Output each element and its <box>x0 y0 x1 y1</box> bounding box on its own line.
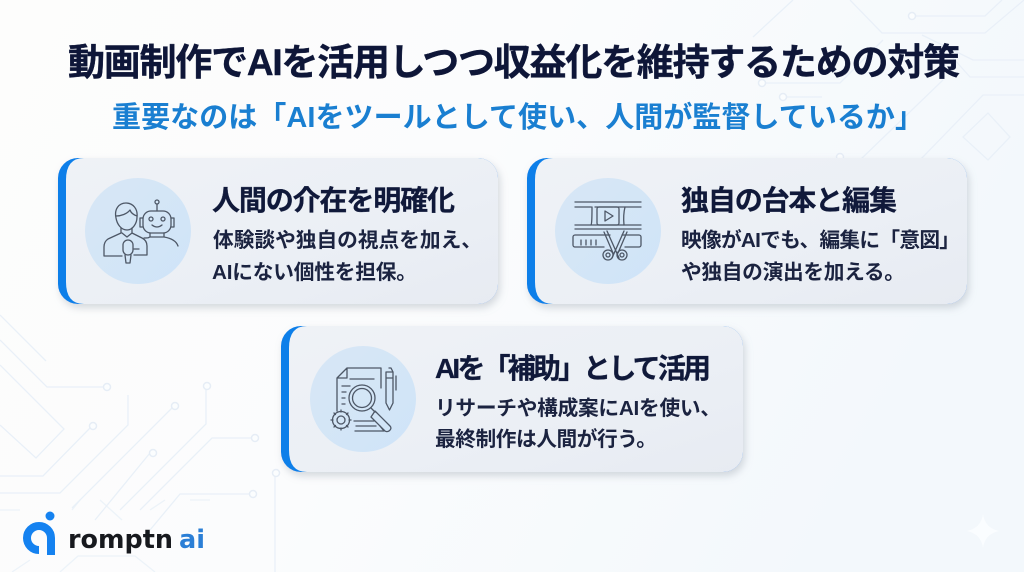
logo wordmark: ai <box>179 525 205 555</box>
icon: logo mark <box>27 512 54 555</box>
heading: 独自の台本と編集 <box>681 185 897 216</box>
panel: original script and editing <box>527 158 967 304</box>
logo wordmark: romptn <box>68 525 173 555</box>
background circuit pattern: lower left <box>0 315 280 572</box>
body text: 映像がAIでも、編集に「意図」 <box>681 228 960 252</box>
panel: human involvement <box>58 158 498 304</box>
body text: 体験談や独自の視点を加え、 <box>213 229 482 252</box>
panel: AI as assistant <box>281 326 743 472</box>
body text line 2: 最終制作は人間が行う。 <box>435 427 657 451</box>
icon: person and robot <box>85 178 191 284</box>
icon: document, magnifier, gear, pen <box>310 346 416 452</box>
icon: sparkle <box>967 514 999 548</box>
logo <box>27 512 205 555</box>
body text: リサーチや構成案にAIを使い、 <box>435 396 721 420</box>
heading: AIを「補助」として活用 <box>435 353 711 384</box>
body text line 2: AIにない個性を担保。 <box>212 261 417 284</box>
heading: 人間の介在を明確化 <box>212 185 455 216</box>
subtitle: 重要なのは「AIをツールとして使い、人間が監督しているか」 <box>112 100 924 134</box>
body text line 2: や独自の演出を加える。 <box>681 261 905 284</box>
icon: film and scissors <box>555 178 661 284</box>
background circuit pattern: upper right <box>753 0 1024 160</box>
title: 動画制作でAIを活用しつつ収益化を維持するための対策 <box>68 42 960 83</box>
